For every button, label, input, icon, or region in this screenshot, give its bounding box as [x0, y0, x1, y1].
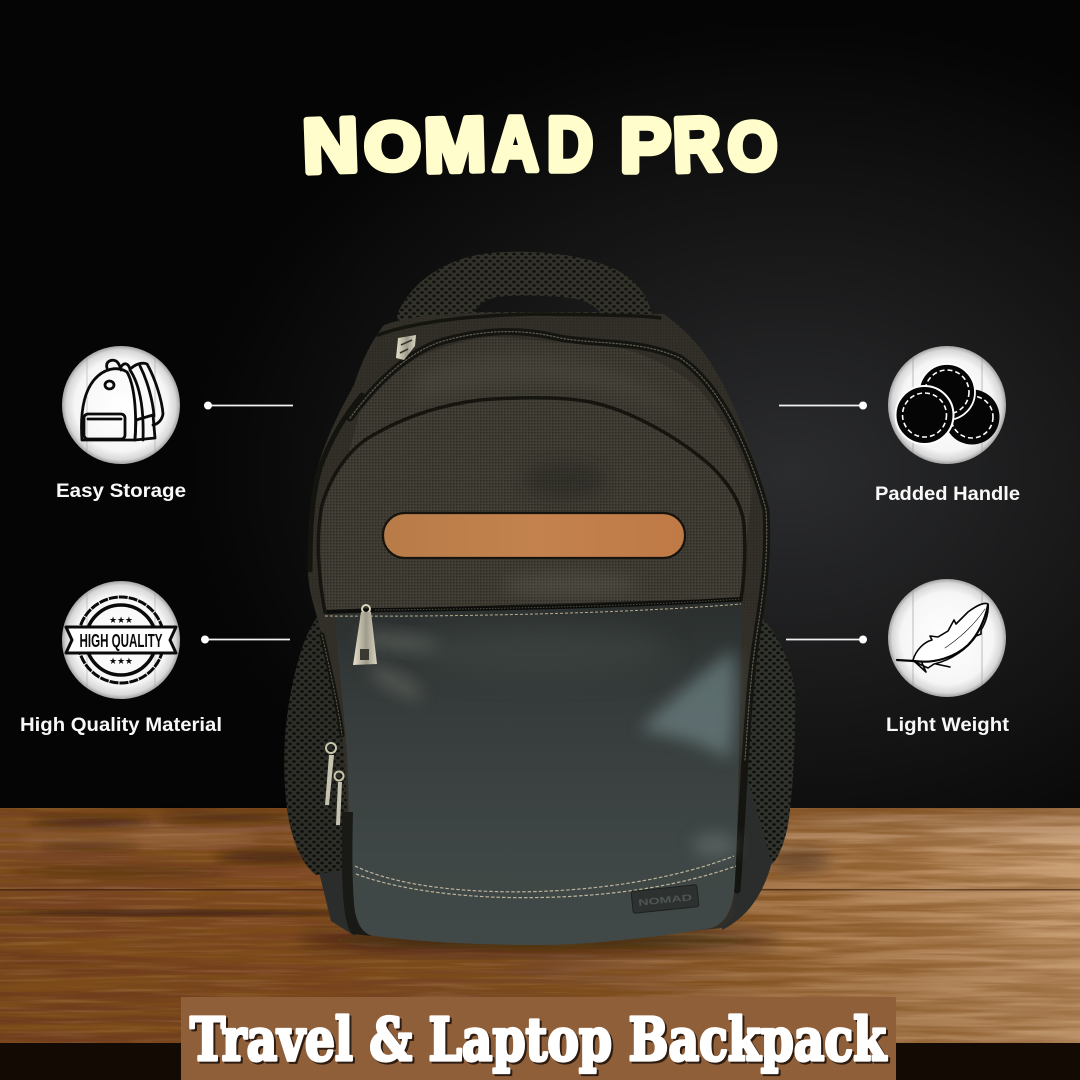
right mesh pocket — [745, 605, 795, 864]
high quality callout line — [201, 636, 290, 644]
brand patch — [631, 885, 699, 913]
front dome pocket — [318, 398, 745, 612]
title: N — [301, 103, 360, 189]
icon: high quality badge: HIGH QUALITY — [80, 631, 162, 651]
banner text: Travel & Laptop Backpack — [190, 1005, 887, 1074]
top zipper pull — [396, 335, 416, 360]
title — [301, 102, 777, 189]
soft shadow on table — [300, 930, 780, 950]
label: padded handle: Padded Handle — [875, 484, 1020, 505]
title: M — [423, 102, 487, 189]
banner text shadow: Travel & Laptop Backpack — [192, 1007, 889, 1076]
icon: padded circles — [896, 364, 1000, 444]
feature: light weight — [786, 579, 1010, 736]
wooden table surface — [0, 808, 1080, 1080]
backpack photo illustration — [284, 252, 795, 950]
title: R — [672, 102, 722, 188]
left mesh pocket — [284, 612, 352, 875]
label: easy storage: Easy Storage — [56, 481, 186, 502]
zipper seams — [310, 314, 767, 890]
padded top handle — [397, 252, 653, 330]
brand patch: NOMAD — [638, 892, 693, 908]
icon: high quality badge: ★★★ — [109, 656, 133, 666]
tan leather slot — [383, 513, 685, 558]
title: O — [728, 110, 777, 184]
feature: easy storage — [56, 346, 293, 502]
dark studio backdrop — [0, 0, 1080, 812]
title: D — [547, 102, 593, 188]
icon: high quality badge: ★★★ — [109, 615, 133, 625]
light weight disc — [888, 579, 1006, 697]
lower side panels — [318, 770, 772, 936]
left black edge binding — [342, 812, 372, 936]
horizontal main zipper — [325, 599, 741, 616]
title: P — [620, 104, 671, 188]
icon: high quality badge — [66, 597, 176, 683]
high quality disc — [62, 581, 180, 699]
label: light weight: Light Weight — [886, 715, 1010, 736]
leather lower panel — [335, 602, 741, 945]
main body shell — [308, 313, 768, 945]
label: high quality material: High Quality Material — [20, 715, 222, 736]
feature: high quality material — [20, 581, 290, 736]
title: A — [492, 102, 538, 187]
light weight callout line — [786, 636, 867, 644]
icon: backpack — [82, 360, 163, 440]
easy storage callout line — [204, 402, 293, 410]
feature: padded handle — [779, 346, 1020, 505]
side zipper pulls — [325, 743, 344, 825]
large zipper pull — [353, 605, 377, 665]
bottom banner — [181, 997, 896, 1080]
middle compartment — [330, 337, 752, 560]
title: O — [364, 110, 420, 184]
padded handle disc — [888, 346, 1006, 464]
easy storage disc — [62, 346, 180, 464]
icon: feather — [897, 603, 988, 672]
padded handle callout line — [779, 402, 867, 410]
stitched seams on leather — [355, 856, 736, 898]
